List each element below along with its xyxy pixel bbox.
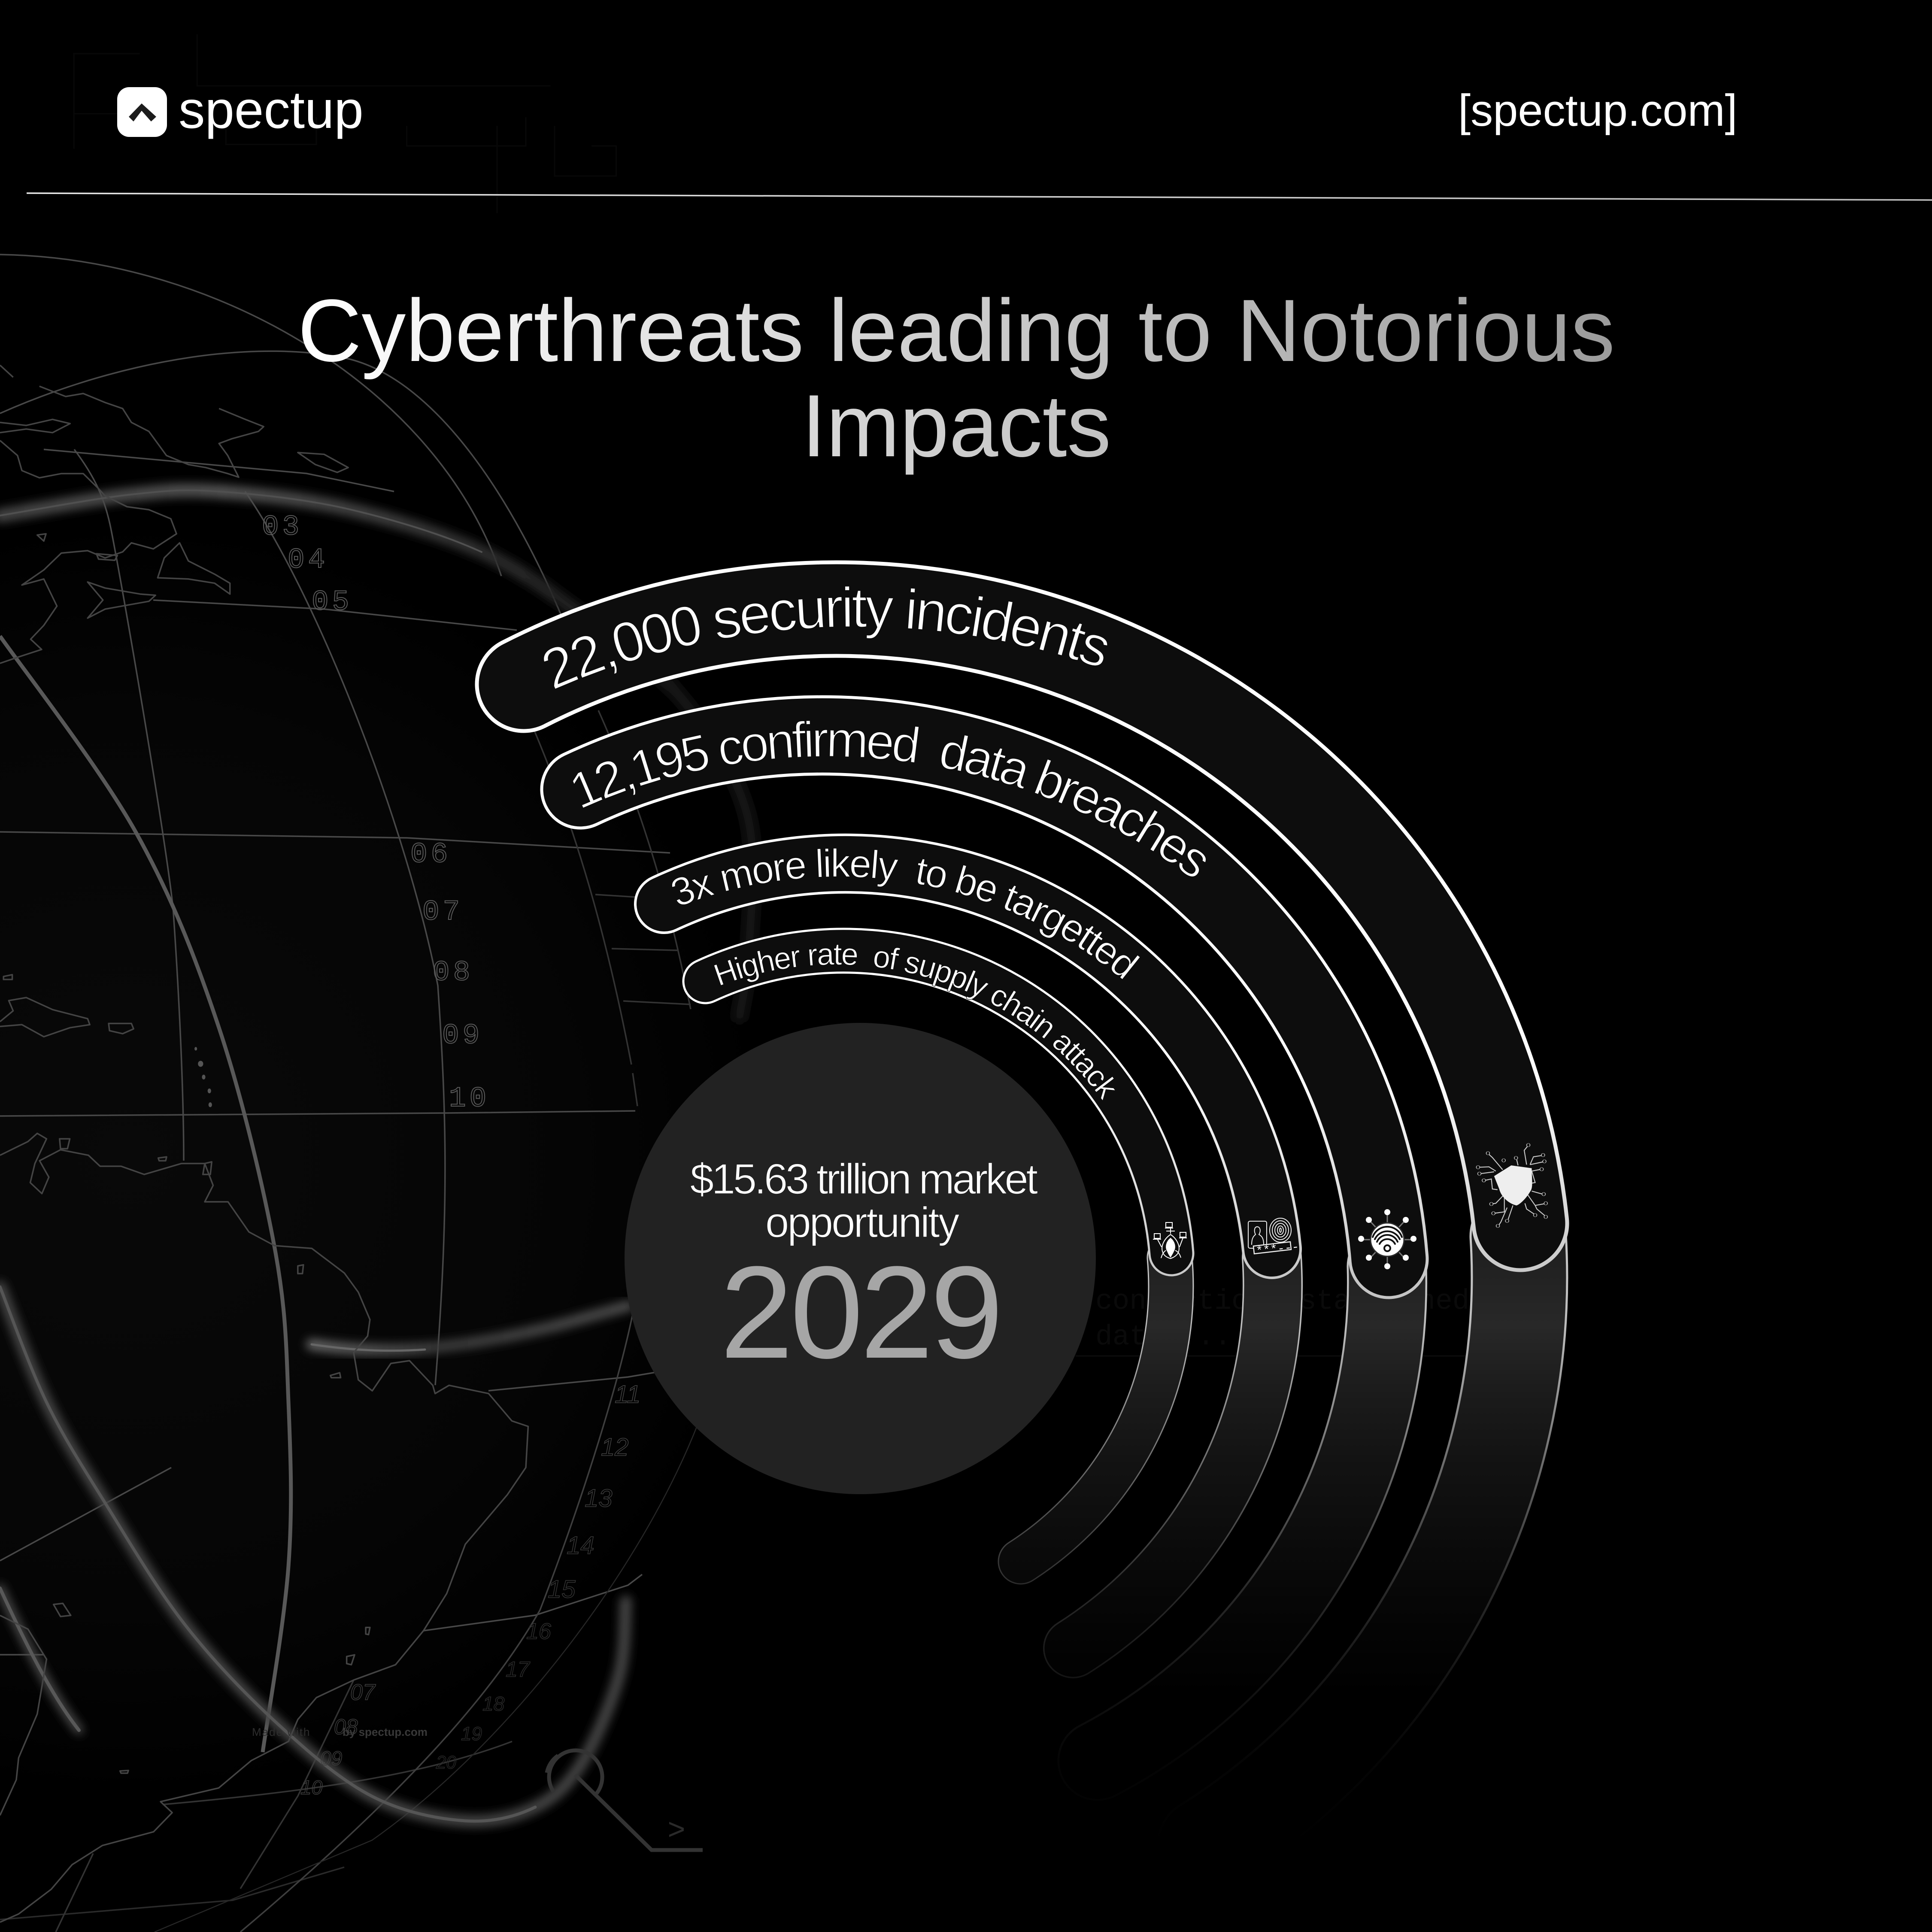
globe grid lines [0, 255, 698, 1932]
market text: opportunity [765, 1198, 959, 1247]
logo: spectup: spectup [179, 81, 364, 140]
lower coordinate numbers: 12 [601, 1433, 629, 1461]
coordinate numbers: 08 [433, 956, 473, 989]
central circle: market opportunity [625, 1023, 1096, 1494]
crosshair target [547, 1750, 703, 1850]
crosshair target: > [667, 1815, 685, 1849]
faint terminal text: connection established [1095, 1285, 1469, 1317]
faint terminal text [1076, 1285, 1470, 1356]
lower coordinate numbers: 10 [300, 1776, 323, 1799]
title: Impacts [801, 376, 1111, 475]
band 1: 22,000 security incidents: 22,000 security incidents [533, 576, 1117, 702]
coordinate numbers: 06 [410, 838, 451, 870]
lower coordinate numbers: 09 [320, 1747, 342, 1769]
lower coordinate numbers [300, 1380, 640, 1799]
icon: shield circuit [1476, 1143, 1547, 1228]
header rule [27, 193, 1932, 200]
lower coordinate numbers: 13 [585, 1484, 613, 1512]
coordinate numbers: 04 [288, 544, 328, 576]
icon: wifi network [1358, 1209, 1416, 1269]
market text [690, 1155, 1038, 1247]
lower coordinate numbers: 17 [506, 1657, 531, 1681]
market text: $15.63 trillion market [690, 1155, 1038, 1203]
South America coastline [0, 1133, 528, 1922]
glowing orbit arcs [0, 490, 753, 1821]
icon: id card and fingerprint [1248, 1218, 1300, 1259]
year: 2029 [720, 1239, 1000, 1386]
lower coordinate numbers: 14 [567, 1532, 594, 1559]
band 3: 3x more likely to be targetted [664, 842, 1300, 1648]
coordinate numbers: 03 [262, 511, 303, 543]
title [298, 281, 1615, 475]
lower coordinate numbers: 08 [334, 1715, 358, 1739]
lower coordinate numbers: 15 [548, 1575, 576, 1603]
lower coordinate numbers: 20 [436, 1752, 456, 1772]
lower coordinate numbers: 16 [526, 1619, 551, 1644]
icon: id card and fingerprint: ***--- [1256, 1241, 1300, 1259]
faint circuit texture [73, 34, 616, 213]
lower coordinate numbers: 18 [482, 1692, 505, 1715]
watermark: Made with [252, 1726, 311, 1738]
watermark [252, 1726, 428, 1738]
faint terminal text: data...... [1095, 1321, 1265, 1353]
icon: hooded hacker with laptops [1153, 1222, 1187, 1259]
coordinate numbers: 10 [449, 1083, 490, 1115]
band 2: 12,195 confirmed data breaches [561, 711, 1416, 1761]
band 1: 22,000 security incidents [524, 576, 1547, 1846]
coordinate numbers: 05 [312, 586, 352, 618]
band 3: 3x more likely to be targetted: 3x more likely to be targetted [665, 842, 1145, 987]
coordinate numbers: 07 [422, 896, 463, 928]
website link: [spectup.com] [1458, 85, 1738, 136]
lower coordinate numbers: 11 [615, 1380, 640, 1408]
coordinate numbers: 09 [442, 1019, 483, 1052]
title: Cyberthreats leading to Notorious [298, 281, 1615, 380]
North America and Caribbean coastlines [0, 365, 348, 1107]
lower coordinate numbers: 19 [461, 1723, 482, 1744]
band 4: Higher rate of supply chain attack: Higher rate of supply chain attack [710, 937, 1125, 1105]
band 2: 12,195 confirmed data breaches: 12,195 confirmed data breaches [561, 711, 1221, 889]
coordinate numbers [262, 511, 490, 1115]
watermark: by spectup.com [343, 1726, 428, 1738]
lower coordinate numbers: 07 [350, 1680, 376, 1705]
band 4: Higher rate of supply chain attack [705, 937, 1187, 1562]
